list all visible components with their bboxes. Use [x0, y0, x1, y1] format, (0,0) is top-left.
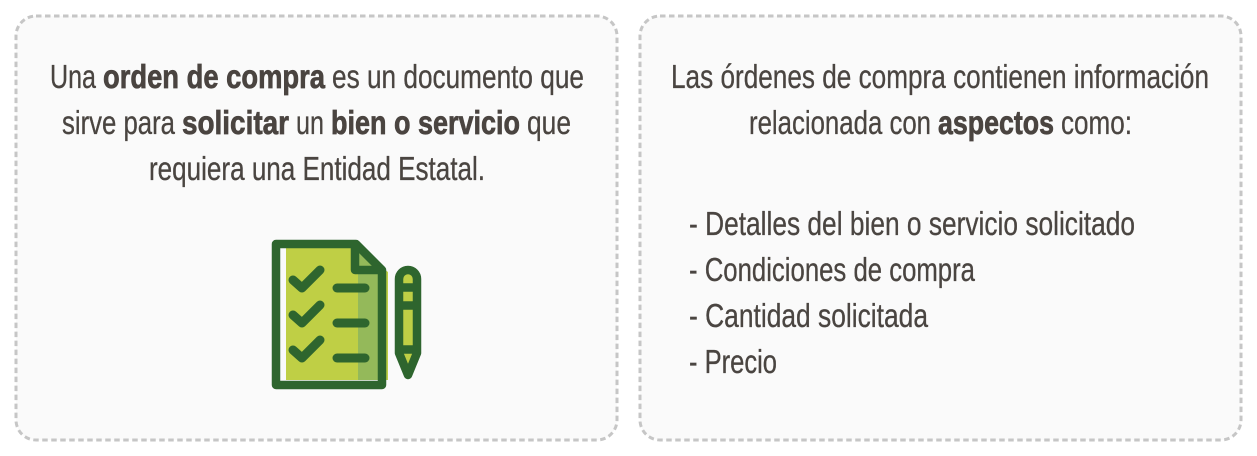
- list: aspects: [689, 205, 1135, 380]
- text: intro to contents: aspectos: [938, 104, 1054, 141]
- list: aspects: - Cantidad solicitada: [689, 297, 929, 334]
- text: definition of purchase order: bien o servicio: [331, 104, 520, 141]
- text: definition of purchase order: solicitar: [182, 104, 289, 141]
- text: definition of purchase order: es un documento que: [332, 58, 584, 95]
- text: definition of purchase order: requiera una Entidad Estatal.: [149, 150, 485, 187]
- list: aspects: - Precio: [689, 343, 777, 380]
- list: aspects: - Detalles del bien o servicio solicitado: [689, 205, 1135, 242]
- text: definition of purchase order: [50, 58, 584, 187]
- text: definition of purchase order: un: [296, 104, 324, 141]
- icon: checklist document: [276, 244, 388, 385]
- icon: pencil: [399, 269, 421, 375]
- text: intro to contents: relacionada con: [749, 104, 931, 141]
- panel: definition: [16, 16, 617, 440]
- text: definition of purchase order: Una: [50, 58, 96, 95]
- text: definition of purchase order: que: [527, 104, 571, 141]
- text: intro to contents: como:: [1061, 104, 1132, 141]
- list: aspects: - Condiciones de compra: [689, 251, 975, 288]
- text: definition of purchase order: orden de compra: [103, 58, 326, 95]
- text: definition of purchase order: sirve para: [62, 104, 176, 141]
- text: intro to contents: [671, 58, 1209, 141]
- panel: contents of purchase order: [640, 16, 1241, 440]
